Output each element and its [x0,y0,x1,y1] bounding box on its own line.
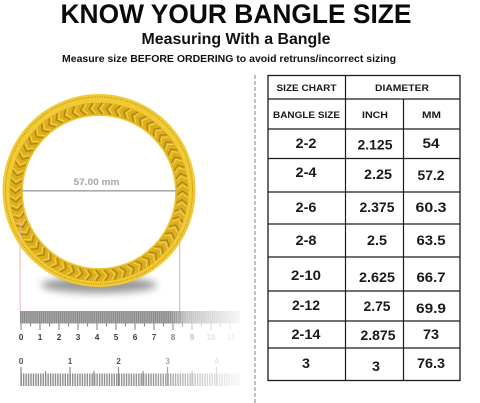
row 2-4: 2.25 [364,167,393,182]
row 2-12 [292,298,446,316]
centimetre ruler: 10 [206,332,216,342]
inch ruler: 0 [19,356,24,366]
centimetre ruler: 5 [114,332,119,342]
centimetre ruler [19,311,240,342]
icon: gold bangle ring [2,94,196,287]
right guide line [179,208,180,323]
inch ruler: 3 [165,356,170,366]
bangle shadow [41,277,157,293]
row 2-8: 63.5 [416,233,446,248]
row 2-4: 57.2 [418,168,444,183]
centimetre ruler: 2 [57,332,62,342]
row 2-6: 2-6 [296,200,317,215]
row 2-12: 2.75 [364,299,391,314]
centimetre ruler: 4 [95,332,100,342]
centimetre ruler: 9 [190,332,195,342]
row 2-8: 2.5 [367,233,388,248]
row 2-10 [291,268,446,285]
row 2-12: 2-12 [292,298,320,313]
instruction line: Measure size BEFORE ORDERING to avoid retruns/incorrect sizing [62,53,396,65]
header rows: BANGLE SIZE [273,110,340,121]
table grid [268,75,460,380]
inch ruler: 2 [116,356,121,366]
header rows: INCH [362,110,388,121]
row 2-14 [292,327,440,343]
dashed divider [254,75,256,403]
centimetre ruler: 0 [19,332,24,342]
centimetre ruler: 7 [152,332,157,342]
row 2-2: 54 [422,136,440,151]
inch ruler: 1 [68,356,73,366]
row 2-12: 69.9 [416,301,446,316]
row 2-2: 2-2 [296,136,316,151]
row 2-4 [296,165,444,183]
subtitle: Measuring With a Bangle [142,31,331,48]
header rows: MM [422,110,441,121]
measurement line [22,190,176,192]
row 2-10: 2-10 [291,268,321,283]
row 3 [302,356,446,374]
centimetre ruler: 6 [133,332,138,342]
row 2-2 [296,136,440,152]
centimetre ruler: 1 [38,332,43,342]
left guide line [20,218,21,311]
row 3: 3 [302,356,311,371]
row 3: 76.3 [417,356,446,371]
row 2-14: 2-14 [292,327,321,342]
row 2-10: 66.7 [416,270,446,285]
size chart table [268,75,460,380]
row 2-14: 73 [423,327,440,342]
header rows: SIZE CHART [276,83,337,94]
row 2-2: 2.125 [358,138,393,152]
header rows: DIAMETER [375,83,429,94]
row 2-6 [296,200,447,215]
row 2-10: 2.625 [359,270,396,285]
centimetre ruler: 11 [227,332,236,342]
row 3: 3 [372,359,381,374]
row 2-14: 2.875 [360,328,396,343]
row 2-8 [296,233,446,248]
header rows [273,83,441,121]
row 2-6: 2.375 [360,200,395,215]
measurement label: 57.00 mm [74,177,120,187]
inch ruler: 4 [214,356,219,366]
row 2-8: 2-8 [296,233,317,248]
centimetre ruler: 3 [76,332,81,342]
centimetre ruler: 8 [171,332,176,342]
braid pattern [10,103,188,281]
inch ruler [19,356,240,386]
row 2-6: 60.3 [416,200,447,215]
row 2-4: 2-4 [296,165,317,180]
